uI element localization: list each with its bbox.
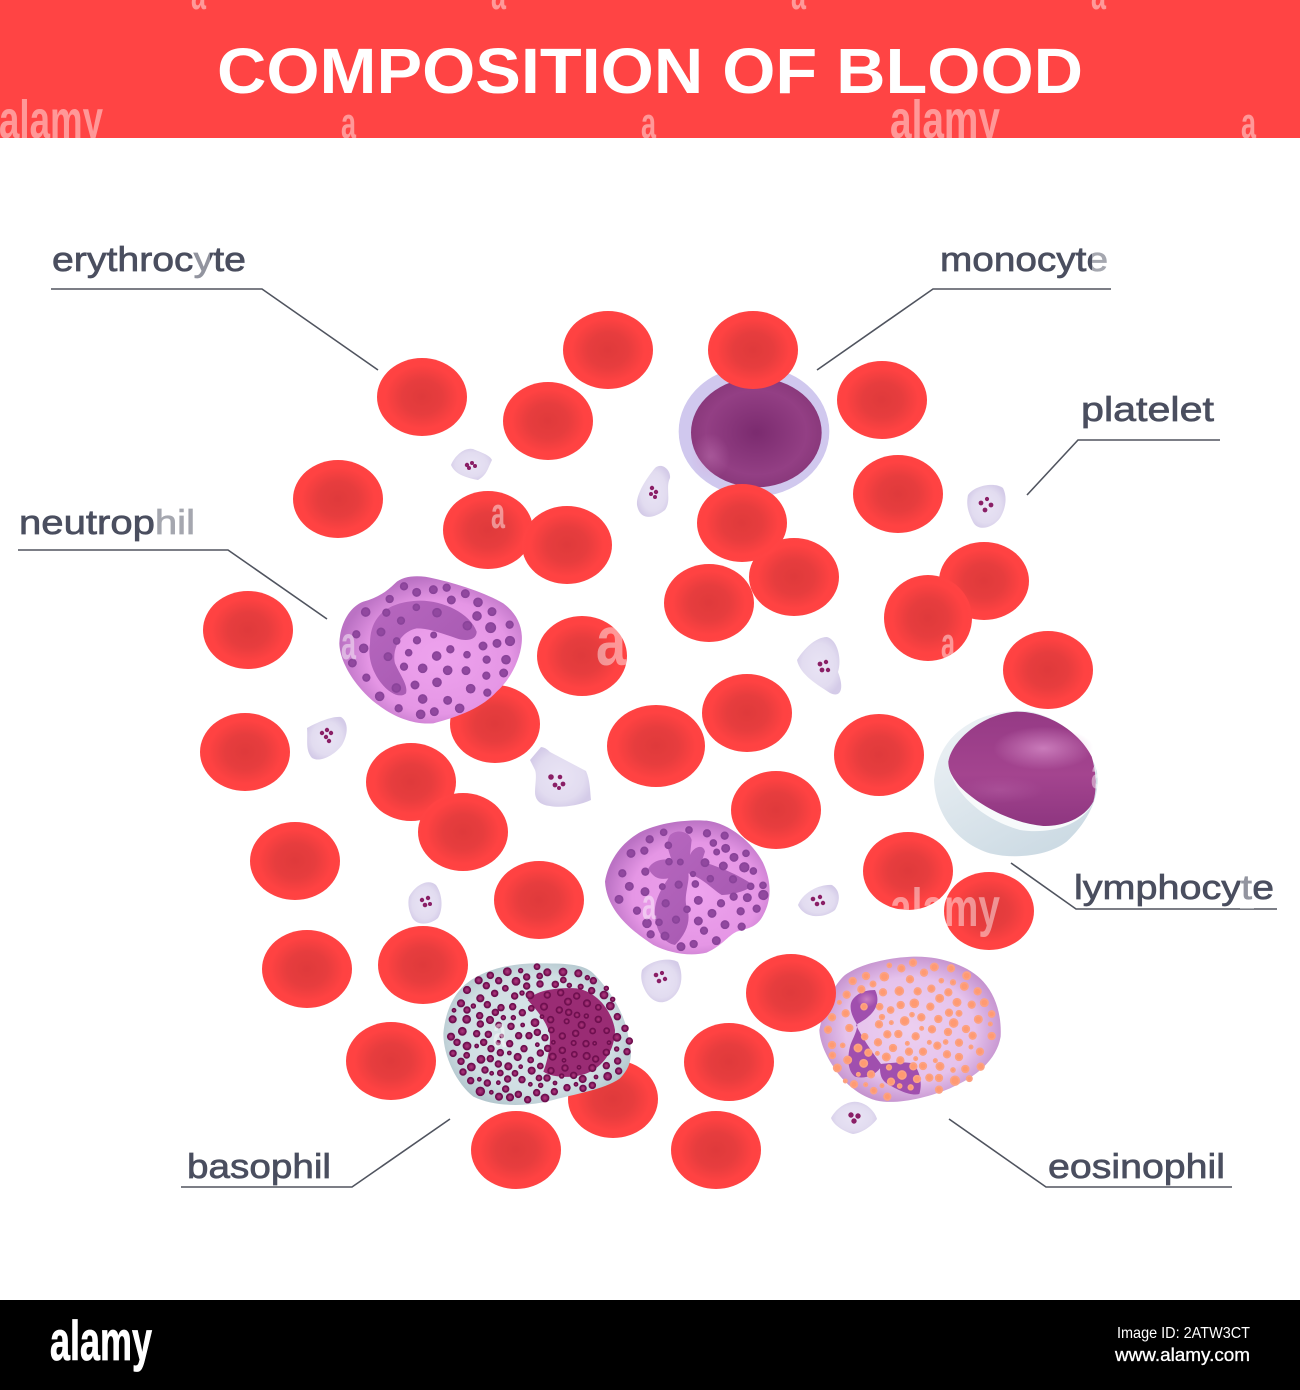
platelets [307, 449, 1006, 1134]
title: COMPOSITION OF BLOOD [217, 35, 1083, 107]
label: eosinophil: eosinophil [1048, 1148, 1225, 1186]
image id: Image ID: 2ATW3CT [1117, 1325, 1250, 1342]
label: monocyte: monocyte [940, 241, 1108, 279]
second neutrophil (segmented nucleus) [605, 820, 770, 954]
label: monocyte [817, 241, 1111, 370]
red blood cells, lower layer [200, 311, 1093, 1189]
watermarks: a [596, 602, 627, 680]
label: erythrocyte: erythrocyte [52, 241, 246, 279]
watermarks: a [491, 489, 505, 538]
label: basophil [181, 1119, 450, 1187]
label: eosinophil [949, 1119, 1232, 1187]
segmented nucleus [648, 831, 753, 945]
watermarks: a [341, 617, 356, 669]
watermarks: a [1091, 749, 1105, 798]
watermarks: a [1241, 99, 1256, 148]
monocyte [679, 366, 829, 497]
footer logo: alamy [50, 1309, 152, 1372]
eosinophil nucleus [848, 990, 921, 1095]
watermarks: alamy [890, 878, 1000, 938]
watermarks: alamy [0, 90, 103, 150]
label: platelet [1027, 391, 1220, 495]
watermarks: a [341, 99, 356, 148]
basophil [443, 963, 632, 1105]
label: neutrophil [18, 504, 327, 619]
watermarks: a [641, 99, 656, 148]
label: erythrocyte [51, 241, 378, 370]
watermarks: alamy [890, 90, 1000, 150]
label: neutrophil: neutrophil [19, 504, 195, 542]
eosinophil [819, 957, 1001, 1102]
watermarks [0, 0, 1256, 1057]
red blood cells over the monocyte [697, 311, 798, 562]
label: platelet: platelet [1081, 391, 1215, 429]
label: lymphocyte: lymphocyte [1074, 869, 1274, 907]
neutrophil [339, 576, 522, 724]
watermarks: a [642, 880, 656, 929]
red blood cell over the eosinophil [746, 954, 836, 1032]
lymphocyte [934, 711, 1098, 856]
label: lymphocyte [1011, 863, 1277, 909]
watermarks: a [493, 1008, 506, 1057]
website: www.alamy.com [1114, 1345, 1250, 1365]
header banner [0, 0, 1300, 138]
lymphocyte nucleus [948, 712, 1096, 826]
footer bar [0, 1300, 1300, 1390]
basophil nucleus [528, 988, 615, 1077]
neutrophil nucleus [369, 601, 477, 695]
watermarks: a [941, 619, 955, 668]
label: basophil: basophil [187, 1148, 331, 1186]
